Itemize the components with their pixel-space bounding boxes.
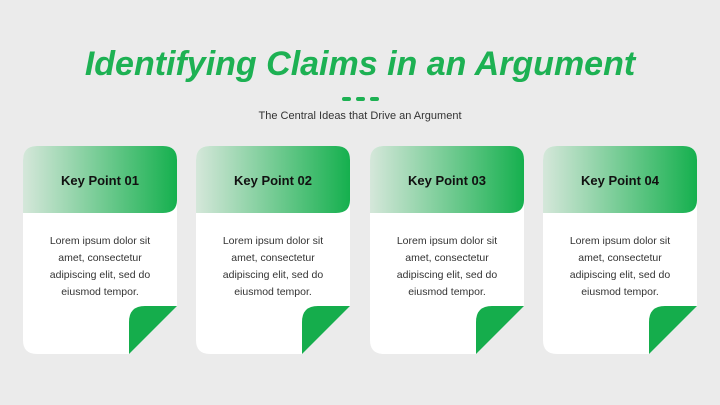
- text: [223, 235, 324, 298]
- card 1: [23, 146, 177, 354]
- heading: Key Point 02: [234, 173, 312, 188]
- decorative dashes: [342, 97, 379, 101]
- title: Identifying Claims in an Argument: [85, 45, 635, 83]
- text: amet, consectetur: [405, 252, 489, 264]
- subtitle: The Central Ideas that Drive an Argument: [258, 110, 462, 122]
- card 3: [370, 146, 524, 354]
- text: adipiscing elit, sed do: [50, 269, 150, 281]
- text: eiusmod tempor.: [408, 286, 486, 298]
- text: [397, 235, 498, 298]
- text: amet, consectetur: [578, 252, 662, 264]
- text: eiusmod tempor.: [581, 286, 659, 298]
- text: eiusmod tempor.: [234, 286, 312, 298]
- text: Lorem ipsum dolor sit: [397, 235, 497, 247]
- heading: Key Point 01: [61, 173, 139, 188]
- text: eiusmod tempor.: [61, 286, 139, 298]
- heading: Key Point 04: [581, 173, 659, 188]
- text: Lorem ipsum dolor sit: [570, 235, 670, 247]
- card 2: [196, 146, 350, 354]
- text: amet, consectetur: [58, 252, 142, 264]
- text: adipiscing elit, sed do: [570, 269, 670, 281]
- text: adipiscing elit, sed do: [397, 269, 497, 281]
- text: [570, 235, 670, 298]
- card 4: [543, 146, 697, 354]
- text: amet, consectetur: [231, 252, 315, 264]
- text: adipiscing elit, sed do: [223, 269, 323, 281]
- text: [50, 235, 150, 298]
- text: Lorem ipsum dolor sit: [223, 235, 323, 247]
- heading: Key Point 03: [408, 173, 486, 188]
- text: Lorem ipsum dolor sit: [50, 235, 150, 247]
